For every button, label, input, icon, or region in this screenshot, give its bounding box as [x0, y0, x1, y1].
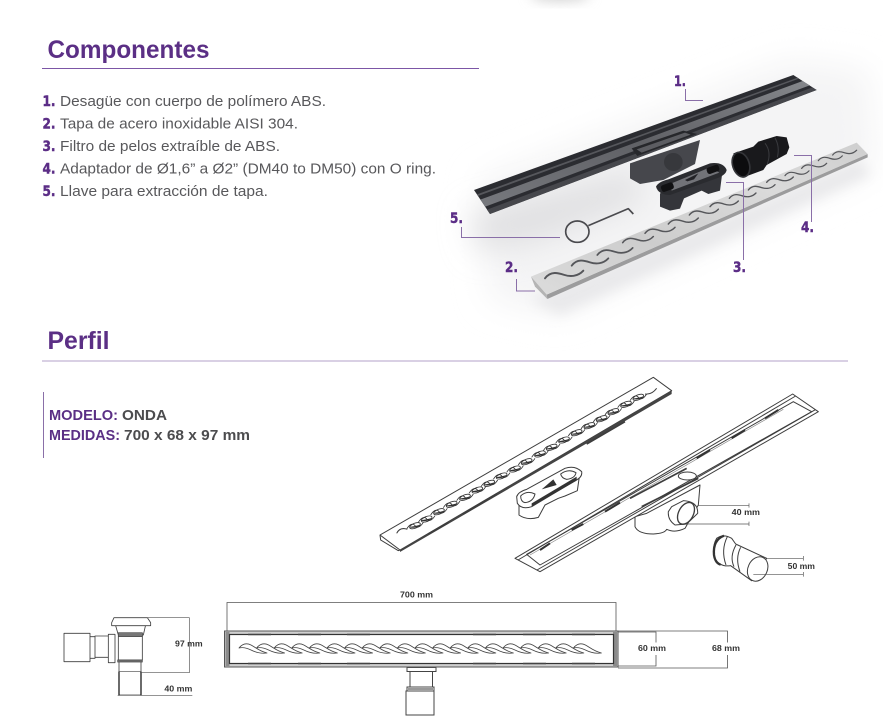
product photo [474, 75, 868, 299]
model and measures block: MEDIDAS: [49, 427, 120, 444]
drain frame [224, 631, 618, 667]
line drawing: adapter with 50 mm [714, 536, 815, 585]
callout 4 [794, 156, 814, 236]
photo shadow backdrop [470, 0, 875, 315]
component list: Llave para extracción de tapa. [60, 183, 268, 200]
top view drawing with 700, 60 and 68 mm [224, 590, 740, 715]
component list: 3. [42, 139, 56, 155]
line drawing: drain with 40 mm outlet [515, 394, 818, 572]
component list: Tapa de acero inoxidable AISI 304. [60, 116, 298, 132]
dimension 700 mm [227, 590, 616, 631]
component list: 2. [42, 116, 56, 132]
callout 1: 1. [674, 74, 686, 90]
dimension 68 mm: 68 mm [712, 643, 740, 653]
side view drawing with 97 mm and 40 mm: 97 mm [175, 639, 203, 649]
heading: Perfil: Perfil [48, 327, 110, 355]
isometric line drawings [380, 377, 818, 585]
callout 2 [505, 260, 535, 291]
title: Componentes: Componentes [48, 36, 210, 64]
dimension 700 mm: 700 mm [400, 590, 433, 600]
component list [42, 93, 436, 200]
callout 3: 3. [733, 260, 746, 276]
black adapter [729, 136, 789, 179]
component list: 5. [42, 184, 56, 200]
model and measures block: MODELO: [49, 407, 118, 424]
dimension 60 mm [618, 632, 666, 666]
dimension 68 mm [618, 631, 740, 668]
side view drawing with 97 mm and 40 mm: 40 mm [164, 684, 193, 694]
wave pattern [239, 644, 601, 653]
callout 3 [726, 182, 746, 276]
callout 2: 2. [505, 260, 518, 276]
model and measures block: 700 x 68 x 97 mm [124, 427, 250, 444]
component list: Desagüe con cuerpo de polímero ABS. [60, 93, 326, 110]
model and measures block: ONDA [122, 407, 167, 424]
hair filter [656, 163, 727, 211]
dimension 60 mm: 60 mm [638, 643, 666, 653]
model and measures block [43, 392, 250, 458]
callout 5: 5. [450, 211, 463, 227]
callout 4: 4. [801, 220, 814, 236]
drain body [474, 75, 817, 214]
line drawing: cover plate [380, 377, 672, 552]
component list: Adaptador de Ø1,6” a Ø2” (DM40 to DM50) con O ring. [60, 160, 436, 178]
component list: 4. [42, 162, 56, 178]
side view drawing with 97 mm and 40 mm [64, 618, 203, 696]
line drawing: adapter with 50 mm: 50 mm [788, 561, 815, 571]
drain outlet [406, 668, 436, 715]
line drawing: hair filter [517, 467, 582, 519]
steel cover plate with wave slots [531, 143, 868, 299]
callout 1 [674, 74, 703, 100]
component list: 1. [42, 94, 56, 110]
callout 5 [450, 211, 560, 238]
extraction key [566, 209, 633, 242]
component list: Filtro de pelos extraíble de ABS. [60, 138, 280, 155]
line drawing: drain with 40 mm outlet: 40 mm [732, 507, 760, 517]
